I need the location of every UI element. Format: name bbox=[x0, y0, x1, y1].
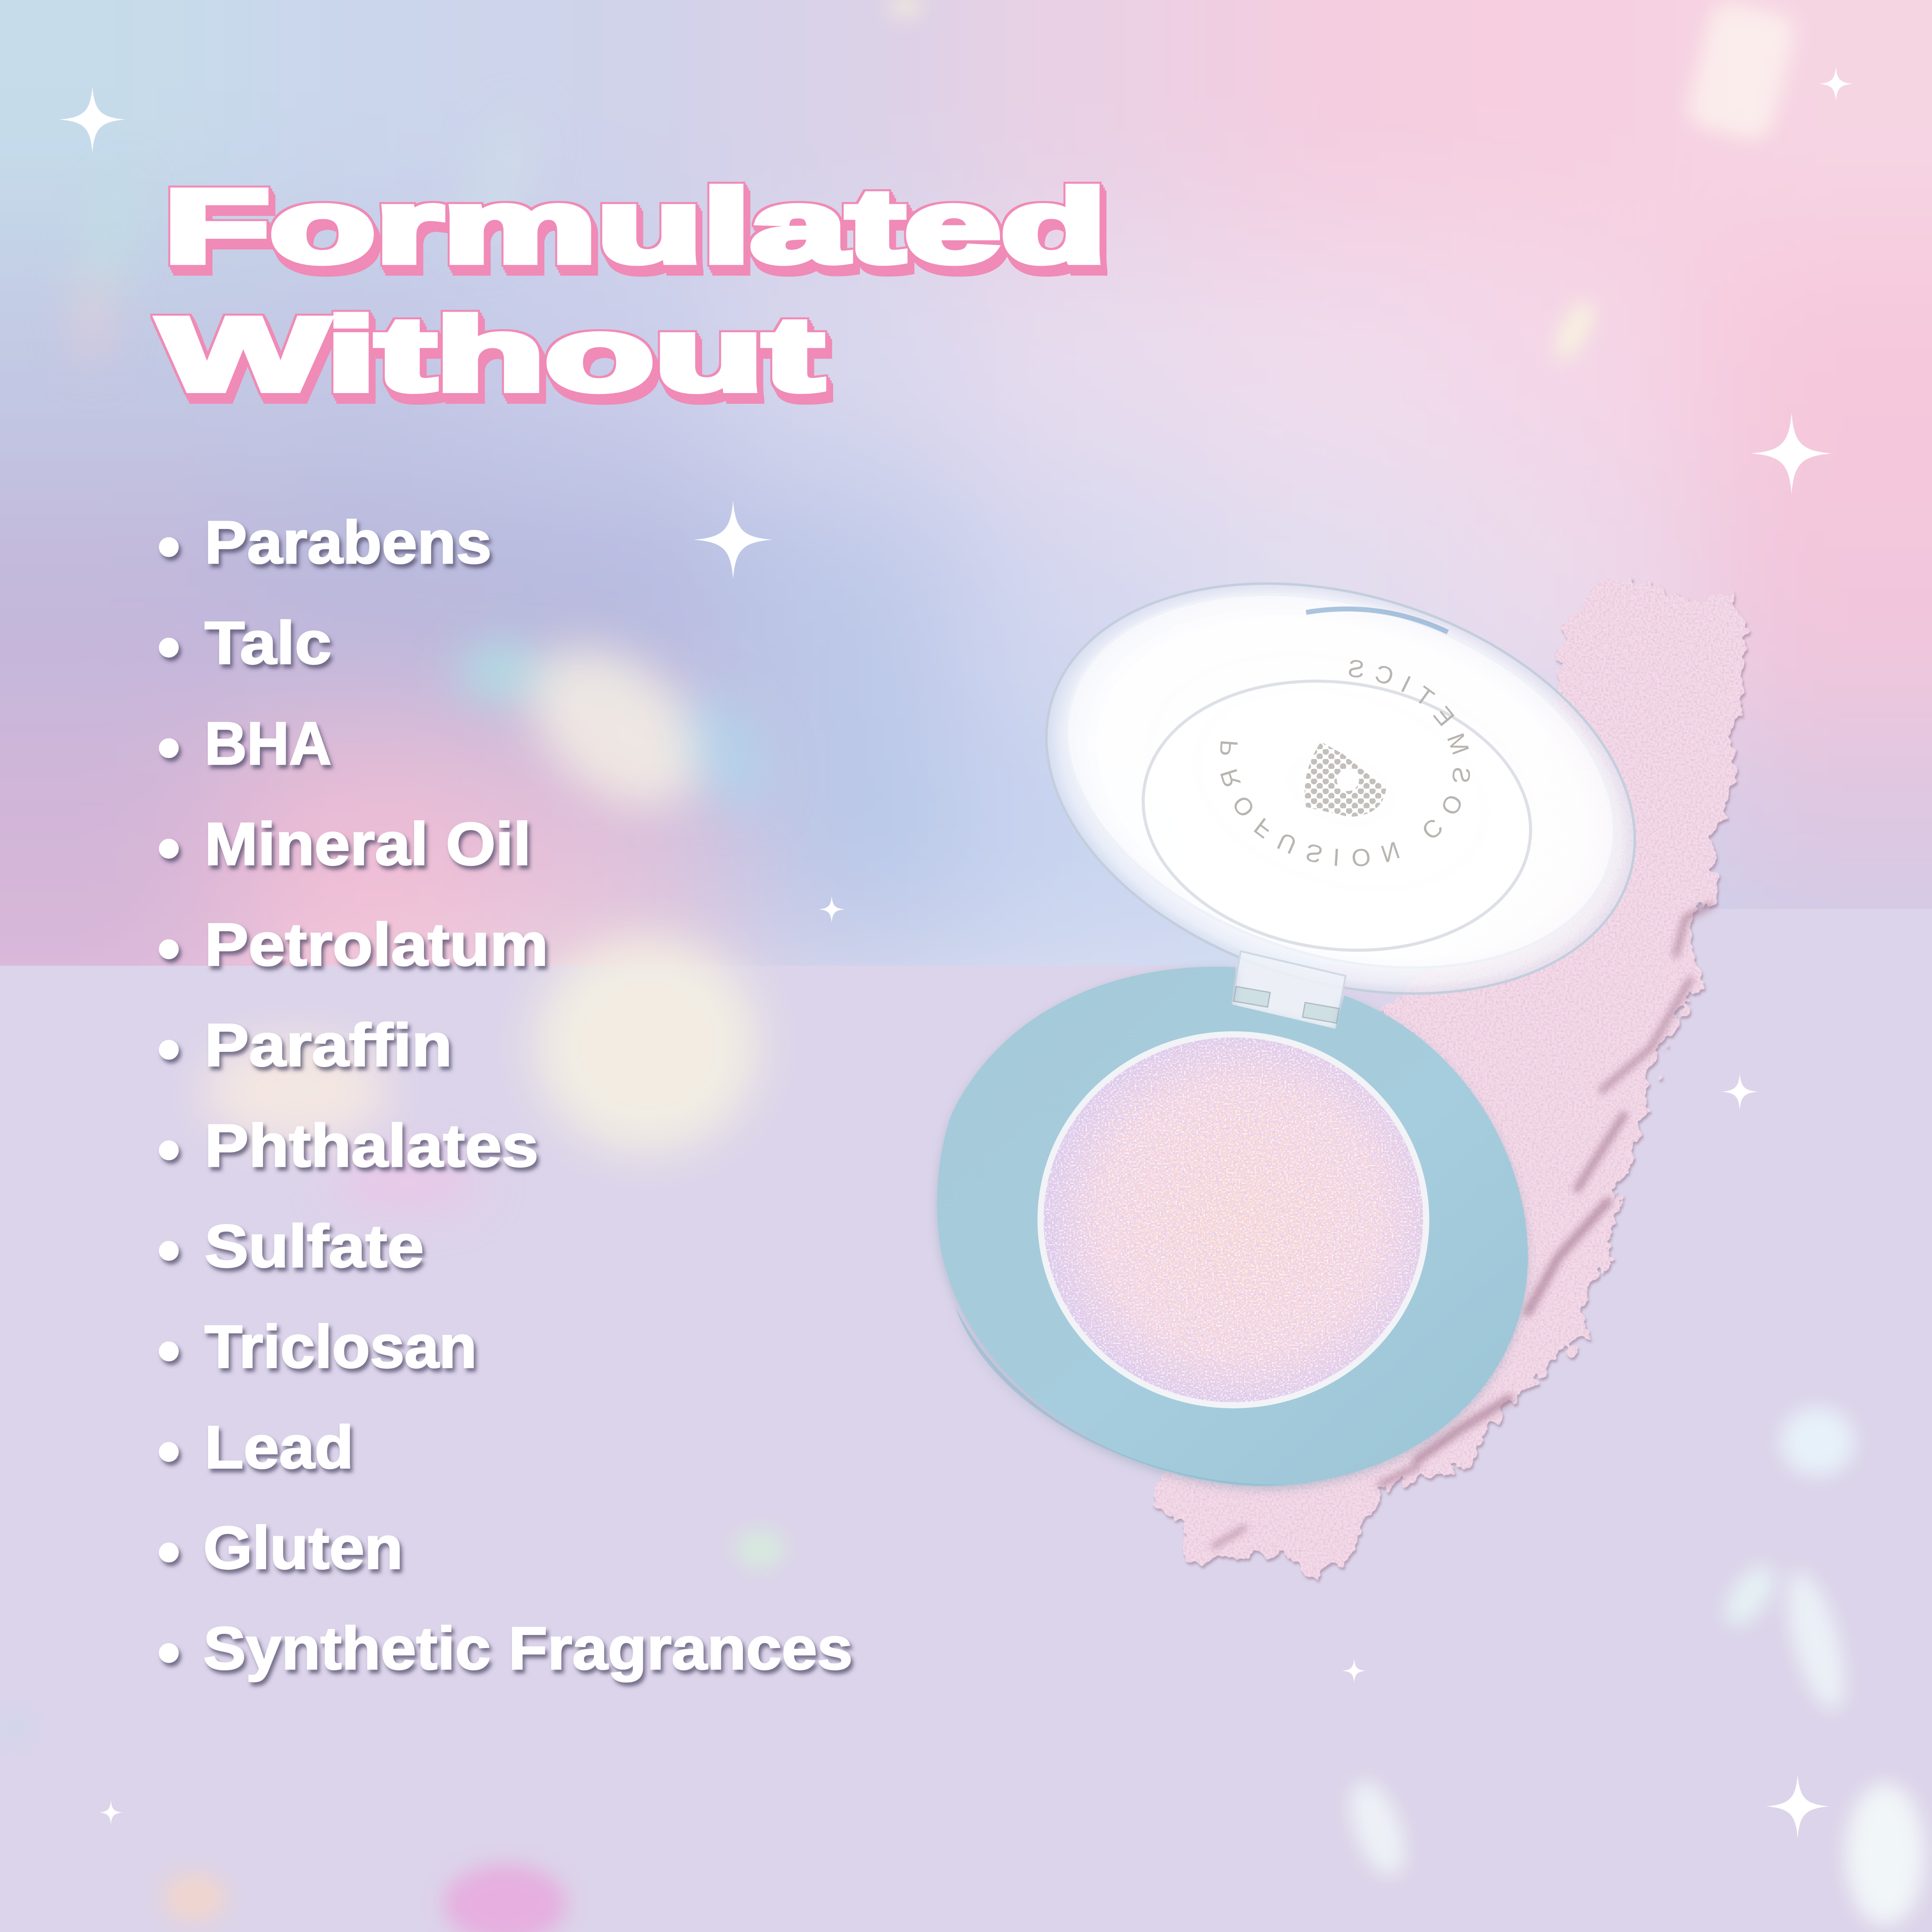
item: Lead: Lead bbox=[204, 1413, 354, 1481]
powder swatch bbox=[1153, 579, 1747, 1580]
lid: inner edge bbox=[1021, 532, 1661, 1031]
item: Synthetic Fragrances: Synthetic Fragrances bbox=[203, 1614, 853, 1682]
item: Parabens: Parabens bbox=[204, 508, 491, 576]
lid: recessed disc bbox=[1126, 657, 1548, 974]
title: Without bbox=[159, 297, 823, 412]
compact: clear lid bbox=[996, 515, 1686, 1062]
item: Petrolatum: Petrolatum bbox=[204, 911, 548, 978]
title bbox=[159, 169, 1106, 412]
compact: blue base bbox=[937, 967, 1528, 1487]
lid: top highlight bbox=[1306, 609, 1448, 632]
item: Talc bbox=[160, 609, 331, 677]
list: excluded ingredients bbox=[160, 508, 853, 1682]
item: Talc: Talc bbox=[204, 609, 331, 677]
item: Triclosan: Triclosan bbox=[204, 1313, 477, 1381]
swatch: shaded creases bbox=[1214, 906, 1710, 1546]
item: Gluten: Gluten bbox=[203, 1514, 403, 1581]
compact: hinge bbox=[1231, 951, 1346, 1033]
item: BHA: BHA bbox=[204, 710, 331, 777]
base: lower edge shading bbox=[955, 1306, 1281, 1486]
lid: dotted logo bbox=[1305, 742, 1386, 817]
item: Phthalates: Phthalates bbox=[204, 1112, 538, 1179]
title: Formulated bbox=[164, 169, 1106, 284]
pan: glitter powder bbox=[1044, 1038, 1423, 1402]
lid: mirrored brand text: PROFUSION COSMETICS bbox=[1203, 641, 1487, 885]
compact: shimmer pan bbox=[1038, 1031, 1429, 1408]
item: Sulfate: Sulfate bbox=[204, 1212, 424, 1280]
item: Paraffin: Paraffin bbox=[204, 1011, 452, 1079]
item: Mineral Oil: Mineral Oil bbox=[204, 810, 531, 878]
